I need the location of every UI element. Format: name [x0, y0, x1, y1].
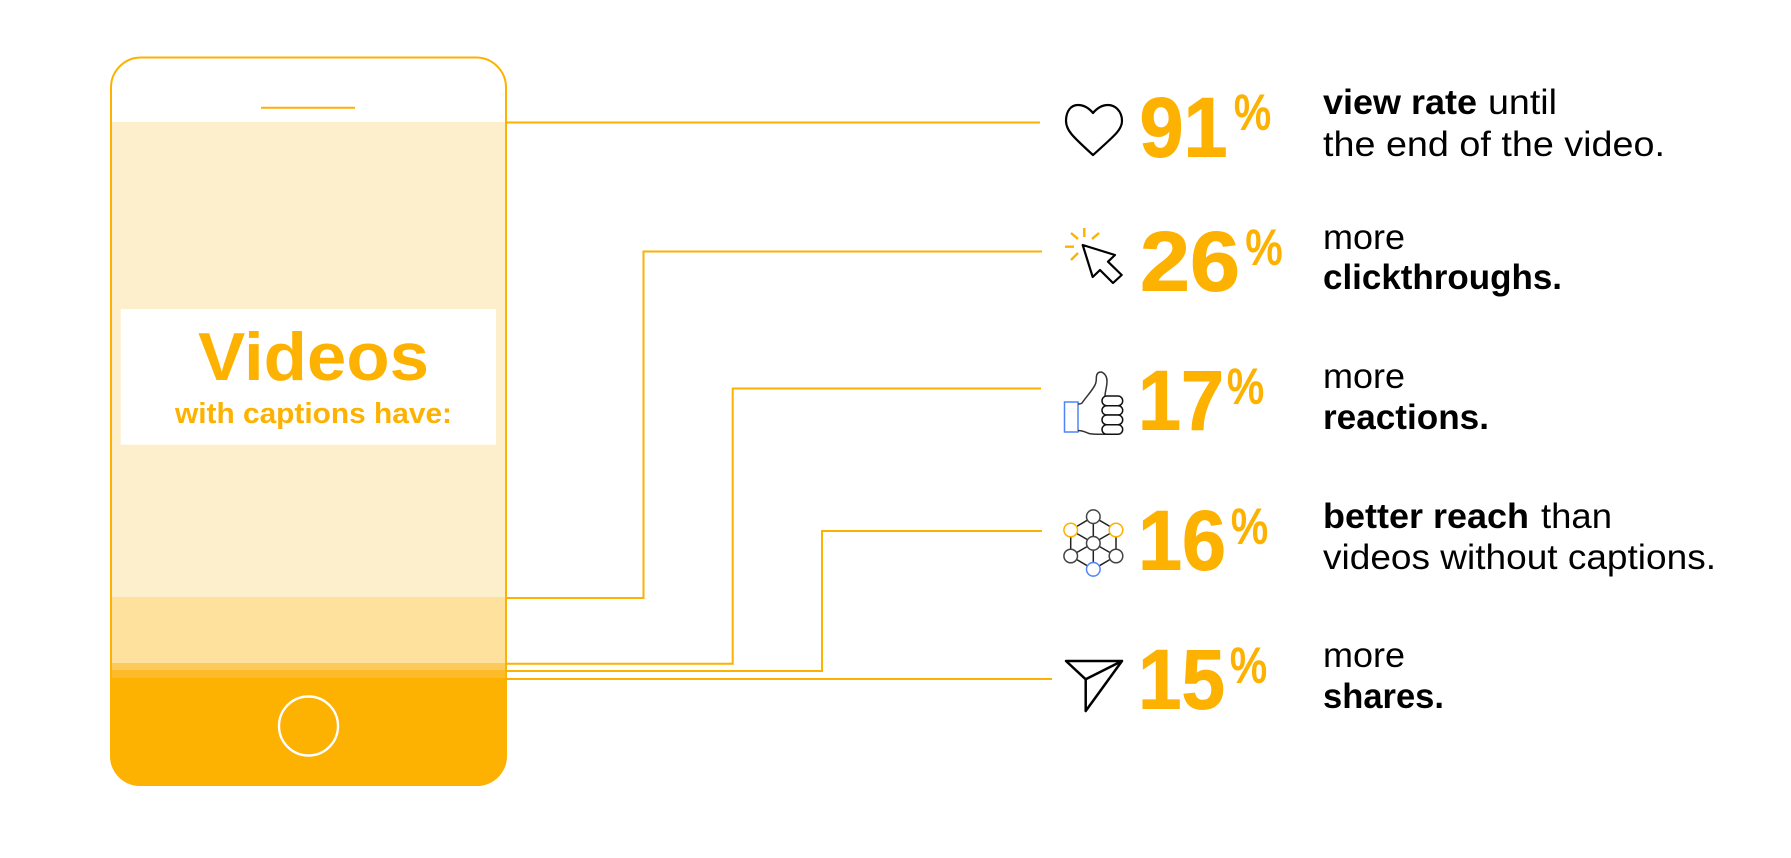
- row: 15%: 15: [1138, 632, 1225, 726]
- row: 17%: more: [1323, 357, 1405, 396]
- row: 17%: %: [1227, 360, 1264, 414]
- row: 15%: more: [1323, 636, 1405, 675]
- connector: reach: [507, 531, 1042, 671]
- row: 91%: the end of the video.: [1323, 125, 1665, 164]
- title box: Videos with captions have: [121, 309, 496, 445]
- title box: Videos with captions have: with captions have:: [174, 398, 452, 430]
- row: 16%: better reach: [1323, 497, 1529, 536]
- phone illustration: [110, 58, 507, 786]
- row: 91%: %: [1234, 86, 1271, 140]
- row: 26%: clickthroughs.: [1323, 258, 1562, 297]
- icon: thumbs up: [1064, 372, 1123, 434]
- row: 16%: than: [1541, 497, 1612, 536]
- row: 16%: %: [1231, 500, 1268, 554]
- connector: clickthroughs: [507, 252, 1042, 598]
- row: 26%: 26: [1140, 214, 1240, 308]
- icon: paper plane: [1066, 661, 1122, 711]
- row: 15%: %: [1230, 639, 1267, 693]
- icon: heart: [1066, 105, 1122, 155]
- row: 15%: [1138, 632, 1444, 726]
- row: 26%: %: [1246, 221, 1282, 275]
- row: 91%: [1140, 80, 1665, 174]
- row: 16%: 16: [1138, 494, 1226, 588]
- icon: cursor click: [1065, 228, 1122, 283]
- row: 17%: reactions.: [1323, 398, 1489, 437]
- connector: reactions: [507, 388, 1041, 664]
- connector: shares: [507, 678, 1052, 680]
- phone speaker: [261, 107, 355, 109]
- row: 16%: videos without captions.: [1323, 538, 1716, 577]
- row: 15%: shares.: [1323, 677, 1444, 716]
- title box: Videos with captions have: Videos: [198, 319, 429, 395]
- icon: network: [1064, 510, 1123, 576]
- row: 16%: [1138, 494, 1716, 588]
- row: 26%: more: [1323, 218, 1405, 257]
- row: 91%: view rate: [1323, 83, 1477, 122]
- row: 17%: [1138, 354, 1489, 448]
- row: 91%: 91: [1140, 80, 1228, 174]
- row: 91%: until: [1488, 83, 1557, 122]
- row: 26%: [1140, 214, 1562, 308]
- phone home button: [279, 696, 338, 756]
- connector: view rate: [507, 122, 1040, 124]
- row: 17%: 17: [1138, 354, 1224, 448]
